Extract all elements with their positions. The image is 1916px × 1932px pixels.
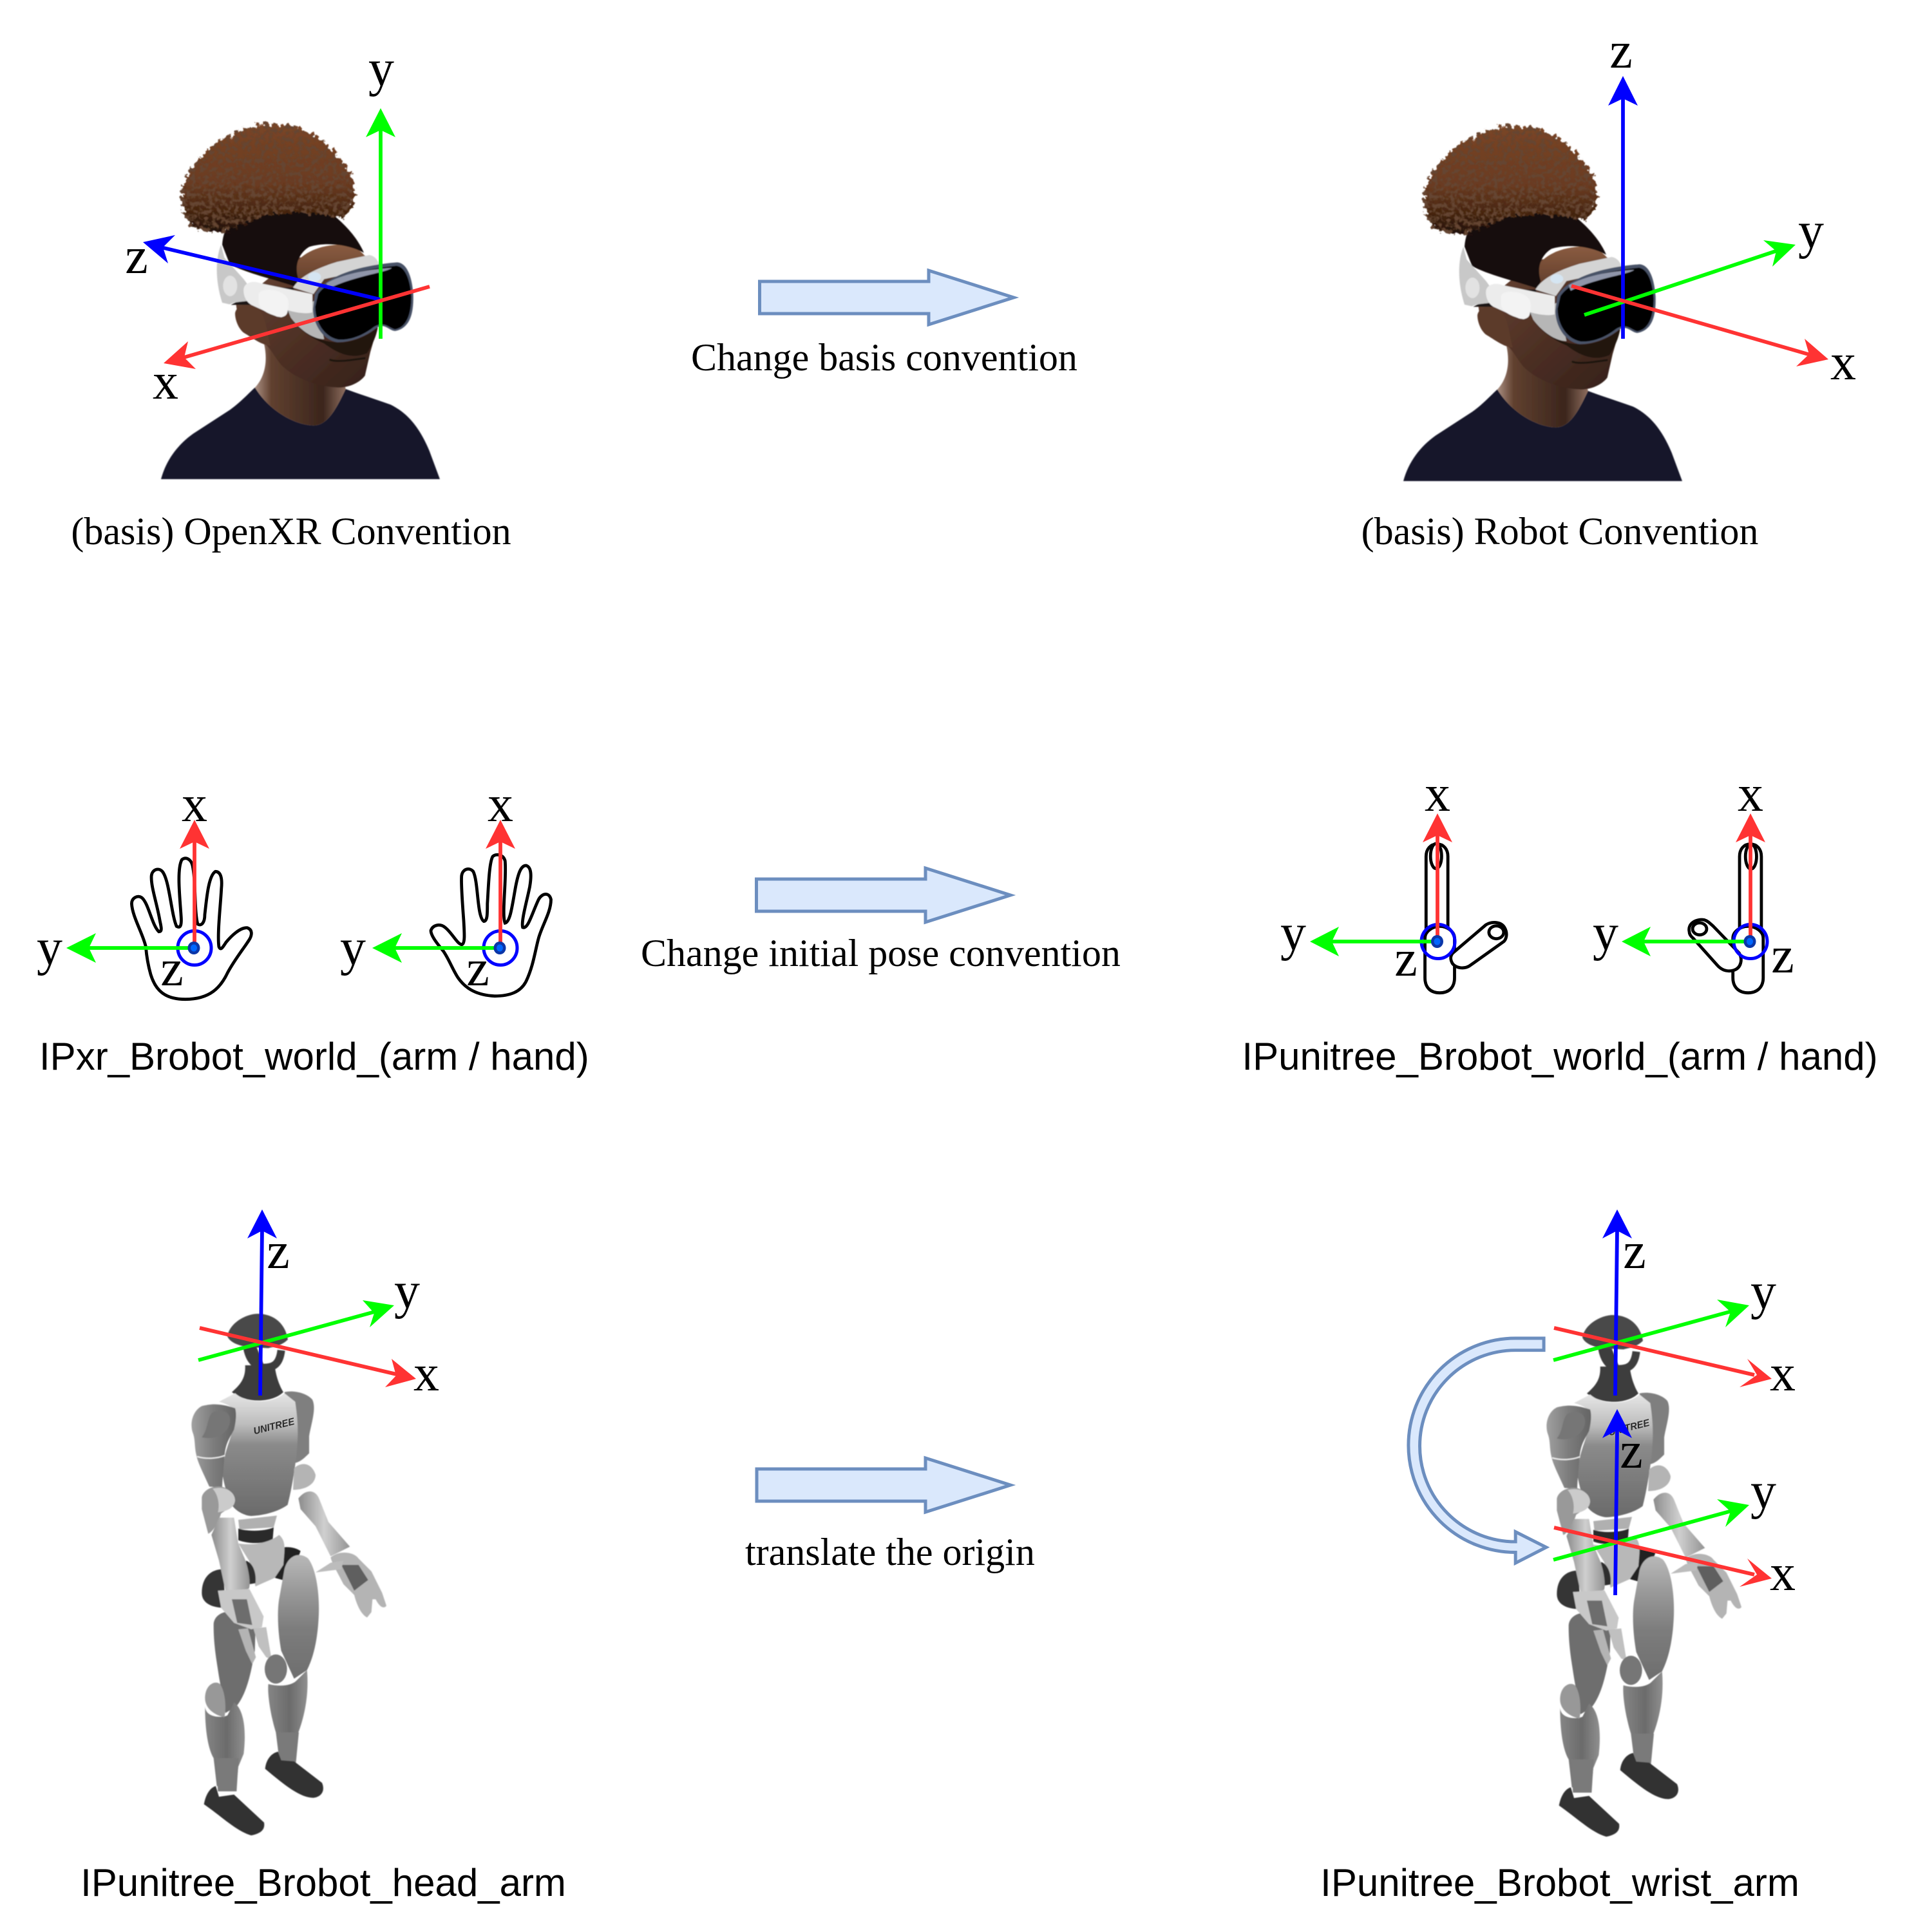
caption: change initial pose convention: Change initial pose convention — [641, 932, 1121, 974]
axis: upper x (red) — [1554, 1328, 1772, 1387]
label: y left: y — [1280, 905, 1306, 961]
photo: Unitree humanoid robot, head frame — [191, 1314, 386, 1835]
axis: z (blue) — [143, 235, 380, 299]
label: x: x — [413, 1345, 439, 1402]
label: x: x — [1830, 334, 1856, 391]
photo: Unitree humanoid robot, head frame: UNITREE — [252, 1416, 296, 1437]
caption: translate the origin: translate the origin — [745, 1531, 1035, 1573]
label: lower x: x — [1770, 1545, 1796, 1602]
label: x right: x — [488, 776, 513, 833]
label: x left: x — [1425, 766, 1450, 822]
curved arrow: origin translation — [1409, 1338, 1546, 1563]
icon: left hand outline — [131, 858, 251, 999]
caption: IPunitree head: IPunitree_Brobot_head_arm — [81, 1861, 566, 1904]
caption: IPxr: IPxr_Brobot_world_(arm / hand) — [39, 1035, 589, 1078]
axes: left gripper — [1310, 813, 1455, 958]
label: y right: y — [340, 920, 366, 976]
block arrow: change initial pose — [756, 868, 1010, 922]
label: z right: z — [466, 940, 489, 997]
robot with head axes — [191, 1209, 439, 1835]
caption: change basis convention: Change basis convention — [691, 336, 1077, 379]
photo: person wearing headset, OpenXR side — [161, 124, 440, 479]
label: lower z: z — [1620, 1423, 1643, 1479]
caption: IPunitree world: IPunitree_Brobot_world_(arm / hand) — [1242, 1035, 1878, 1078]
label: z: z — [267, 1223, 290, 1280]
icon: right gripper — [1689, 844, 1763, 993]
block arrow: translate origin — [757, 1458, 1010, 1512]
left and right hand diagrams with XR axes — [37, 776, 551, 999]
photo: Unitree humanoid robot, wrist frame — [1546, 1315, 1741, 1837]
axis: lower x (red) — [1554, 1528, 1772, 1587]
label: z: z — [125, 228, 148, 285]
headset wearer with OpenXR axes — [125, 41, 440, 479]
label: y left: y — [37, 920, 62, 976]
axis: x (red) — [200, 1328, 416, 1387]
label: x: x — [153, 354, 178, 410]
robot with wrist axes — [1409, 1209, 1796, 1837]
axis: z (blue) — [247, 1209, 277, 1396]
photo: person wearing headset, robot side — [1403, 126, 1682, 481]
axes: left hand — [66, 820, 211, 965]
label: y right: y — [1593, 905, 1618, 961]
label: y: y — [368, 41, 394, 97]
axis: lower z (blue) — [1602, 1409, 1632, 1595]
label: lower y: y — [1750, 1463, 1776, 1520]
axis: y (green) — [1584, 240, 1796, 315]
label: x right: x — [1738, 766, 1763, 822]
photo: Unitree humanoid robot, wrist frame: UNITREE — [1608, 1417, 1651, 1438]
label: z right: z — [1771, 927, 1794, 984]
caption: IPunitree wrist: IPunitree_Brobot_wrist_arm — [1320, 1861, 1799, 1904]
axis: y (green) — [366, 108, 395, 339]
axis: upper z (blue) — [1602, 1209, 1632, 1396]
axis: upper y (green) — [1553, 1300, 1749, 1360]
axis: x (red) — [1571, 286, 1828, 366]
axis: lower y (green) — [1553, 1499, 1749, 1560]
label: upper x: x — [1770, 1345, 1796, 1402]
label: y: y — [394, 1263, 420, 1320]
axis: z (blue) — [1608, 76, 1638, 339]
axes: right gripper — [1622, 813, 1767, 958]
gripper diagrams with Unitree axes — [1280, 766, 1794, 993]
axis: x (red) — [164, 287, 430, 369]
label: upper y: y — [1750, 1264, 1776, 1320]
label: z left: z — [160, 940, 184, 997]
label: x left: x — [182, 776, 207, 833]
label: z left: z — [1394, 931, 1418, 987]
icon: left gripper — [1425, 844, 1506, 993]
axis: y (green) — [198, 1300, 394, 1360]
caption: Robot basis: (basis) Robot Convention — [1361, 510, 1758, 553]
block arrow: change basis convention — [760, 270, 1014, 325]
axes: right hand — [372, 820, 517, 965]
caption: OpenXR basis: (basis) OpenXR Convention — [71, 510, 511, 553]
icon: right hand outline — [431, 855, 551, 996]
label: upper z: z — [1623, 1223, 1646, 1280]
label: y: y — [1798, 203, 1824, 260]
headset wearer with robot axes — [1403, 23, 1856, 481]
label: z: z — [1609, 23, 1633, 79]
